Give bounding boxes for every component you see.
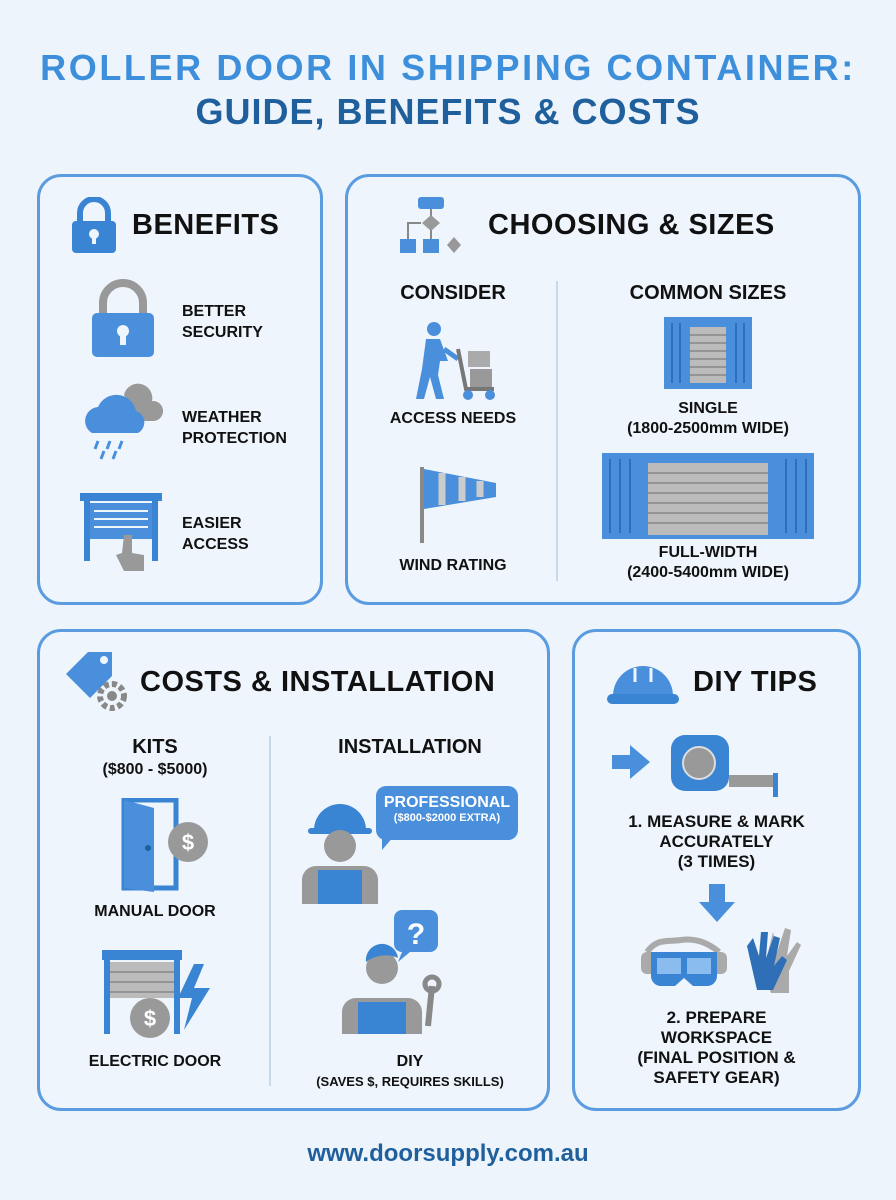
text: better security: SECURITY [182,324,263,341]
text: electric door: ELECTRIC DOOR [89,1053,221,1070]
icon: roller door with hand [80,493,162,571]
footer url: www.doorsupply.com.au [307,1140,589,1167]
text: better security [182,303,263,341]
text: full-width size: (2400-5400mm WIDE) [627,564,789,581]
callout: professional: PROFESSIONAL [384,794,510,811]
text: step 1 [628,812,805,871]
text: weather protection: WEATHER [182,409,262,426]
subheading: consider: CONSIDER [400,282,506,304]
text: easier access [182,515,249,553]
icon: diy worker with wrench [342,910,442,1034]
text: diy: (SAVES $, REQUIRES SKILLS) [316,1074,504,1089]
text: step 1: (3 TIMES) [678,852,755,871]
icon: cloud rain [85,384,163,460]
icon: professional worker [302,804,378,904]
column: common sizes [602,282,814,581]
column: installation [302,736,518,1089]
text: step 2: SAFETY GEAR) [653,1068,780,1087]
text: step 1: ACCURATELY [659,832,774,851]
title: ROLLER DOOR IN SHIPPING CONTAINER: [40,47,856,88]
icon: goggles and gloves [641,928,801,993]
icon: flowchart [400,197,461,253]
icon: single container [664,317,752,389]
heading: benefits: BENEFITS [132,209,279,241]
text: access needs: ACCESS NEEDS [390,410,516,427]
heading: choosing & sizes: CHOOSING & SIZES [488,209,775,241]
text: step 2: WORKSPACE [661,1028,772,1047]
column: kits: ($800 - $5000) [103,761,207,778]
column: consider [390,282,516,574]
text: weather protection: PROTECTION [182,430,287,447]
title: GUIDE, BENEFITS & COSTS [195,91,701,132]
icon: diy worker with wrench: ? [407,918,425,951]
icon: electric door [102,950,210,1038]
icon: manual door with coin [122,798,208,892]
text: easier access: ACCESS [182,536,249,553]
text: diy [316,1053,504,1089]
subheading: kits: KITS [132,736,178,758]
text: wind rating: WIND RATING [399,557,507,574]
subheading: common sizes: COMMON SIZES [630,282,786,304]
text: manual door: MANUAL DOOR [94,903,216,920]
text: full-width size: FULL-WIDTH [659,544,757,561]
text: single size: SINGLE [678,400,738,417]
panel: costs & installation [37,629,550,1111]
icon: electric door: $ [144,1006,156,1031]
column: kits [89,736,221,1070]
icon: tape measure [671,735,778,797]
icon: padlock [92,279,154,357]
text: weather protection [182,409,287,447]
callout: professional [376,786,518,840]
icon: person with trolley [416,322,495,400]
panel: diy tips [572,629,861,1111]
panel: benefits [37,174,323,605]
text: step 1: 1. MEASURE & MARK [628,812,805,831]
text: step 2 [637,1008,796,1087]
text: step 2: (FINAL POSITION & [637,1048,796,1067]
icon: padlock header [72,197,116,253]
panel: choosing & sizes [345,174,861,605]
subheading: installation: INSTALLATION [338,736,482,758]
text: easier access: EASIER [182,515,242,532]
icon: full-width container [602,453,814,539]
text: single size [627,400,789,437]
title [40,47,856,132]
text: single size: (1800-2500mm WIDE) [627,420,789,437]
text: step 2: 2. PREPARE [667,1008,766,1027]
callout: professional: ($800-$2000 EXTRA) [394,812,500,824]
heading: diy tips: DIY TIPS [693,666,817,698]
icon: arrow down [699,884,735,922]
icon: price tag with gear [66,652,127,711]
text: full-width size [627,544,789,581]
heading: costs & installation: COSTS & INSTALLATION [140,666,495,698]
icon: hard hat [607,666,679,704]
icon: manual door with coin: $ [182,830,194,855]
text: diy: DIY [397,1053,423,1070]
text: better security: BETTER [182,303,246,320]
icon: arrow right [612,745,650,779]
icon: windsock [420,467,496,543]
